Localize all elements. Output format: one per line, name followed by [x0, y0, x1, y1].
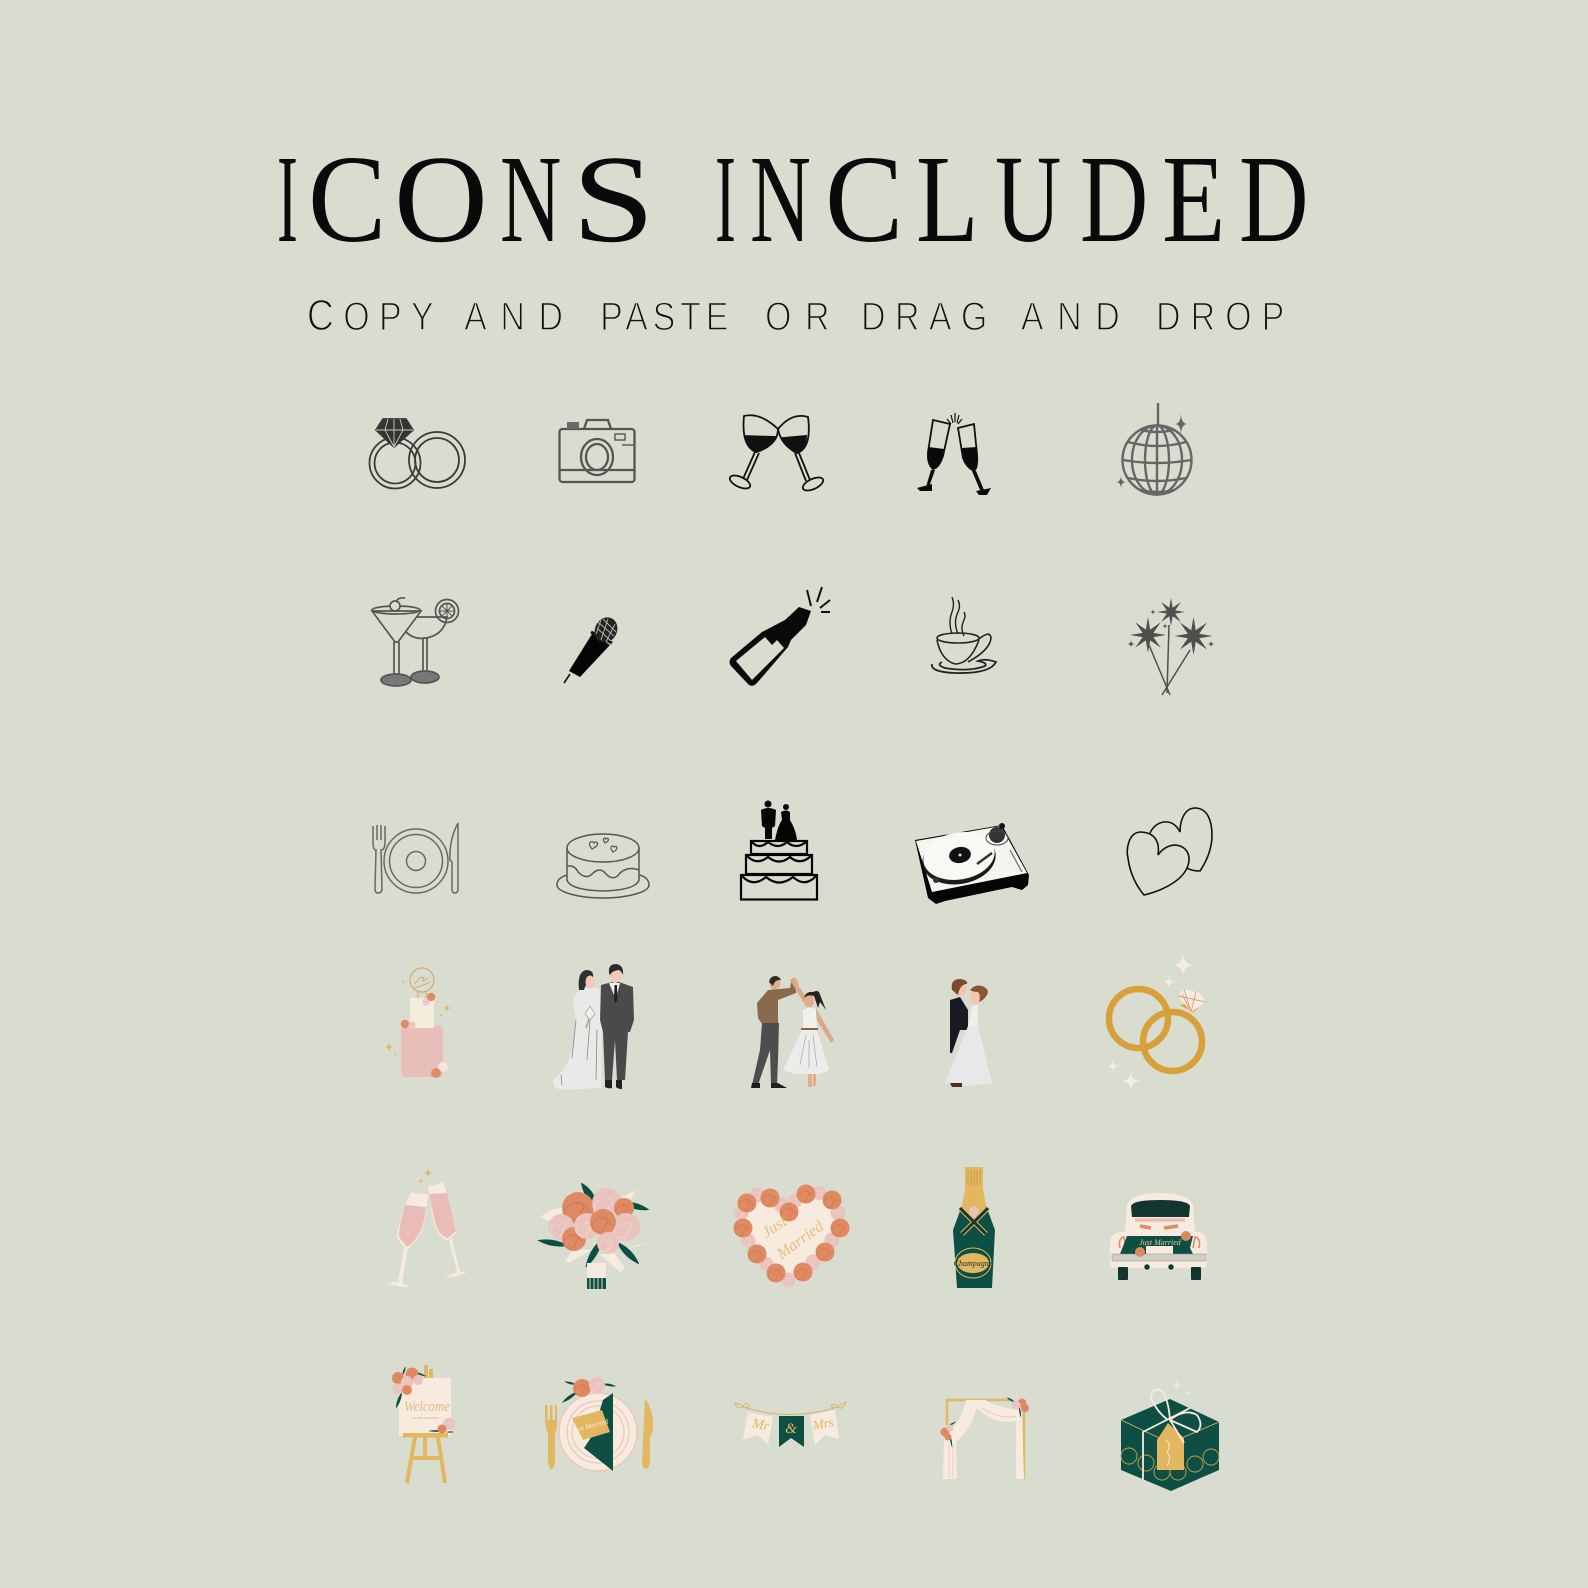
icon: pink champagne flutes	[387, 1168, 467, 1288]
title: E	[1162, 131, 1225, 269]
icon: bride and groom standing	[553, 964, 634, 1090]
icon: champagne bottle: Champagne	[954, 1259, 993, 1268]
icon: floral arch	[940, 1397, 1029, 1479]
icon: mr and mrs bunting	[735, 1402, 846, 1447]
icon: cocktails	[372, 598, 458, 686]
icon: welcome sign easel: Welcome	[404, 1399, 450, 1415]
icon: just married car	[1110, 1193, 1207, 1280]
icon: mr and mrs bunting: &	[785, 1421, 797, 1437]
icon: welcome sign easel	[392, 1365, 455, 1483]
title: D	[1080, 131, 1148, 269]
title: U	[995, 131, 1062, 269]
icon: couple dancing	[751, 976, 834, 1088]
icon: microphone	[564, 614, 621, 683]
icon: pink wedding cake	[384, 968, 452, 1078]
icon: green gift box	[1121, 1379, 1219, 1491]
icon: just married car: Just Married	[1139, 1238, 1182, 1247]
title: I	[715, 131, 736, 269]
icon: place setting outline	[373, 823, 458, 893]
icon: colour place setting: Just Married	[572, 1417, 610, 1435]
icon: sparklers	[1127, 598, 1214, 695]
icon: rose bouquet	[537, 1180, 650, 1289]
subtitle: C	[307, 290, 343, 340]
icon: just married rose heart	[734, 1184, 850, 1288]
icon: disco ball	[1116, 403, 1192, 494]
icon: champagne bottle	[953, 1167, 995, 1288]
icon: coffee cup	[932, 597, 996, 673]
icon: mr and mrs bunting: Mr	[750, 1417, 771, 1435]
subtitle: AND	[464, 293, 577, 339]
icon: couple embracing	[945, 979, 992, 1087]
icon: welcome sign easel: TO OUR WEDDING	[412, 1416, 439, 1420]
icon: just married rose heart: Married	[773, 1217, 828, 1263]
title: I	[277, 131, 298, 269]
subtitle: DROP	[1156, 293, 1294, 339]
icon: tiered cake with couple topper	[741, 800, 817, 900]
icon: mr and mrs bunting: Mrs	[811, 1414, 835, 1433]
subtitle: PASTE	[600, 293, 733, 339]
title: L	[916, 131, 978, 269]
title: O	[394, 131, 487, 269]
icon: diamond ring and band	[370, 419, 465, 488]
icon: turntable	[915, 823, 1029, 904]
icon: colour place setting	[545, 1377, 653, 1471]
subtitle: DRAG	[861, 293, 997, 339]
title	[277, 131, 1309, 269]
title: C	[825, 131, 903, 269]
icon: champagne bottle popping	[730, 587, 830, 686]
title: N	[500, 131, 561, 269]
icon: two hearts outline	[1127, 808, 1212, 895]
subtitle: OR	[765, 293, 843, 339]
icon: clinking champagne flutes	[917, 413, 991, 495]
title: C	[308, 131, 386, 269]
icon: gold rings with diamond	[1106, 953, 1206, 1092]
title: S	[572, 131, 654, 269]
subtitle: AND	[1021, 293, 1133, 339]
icon: clinking wine glasses	[728, 415, 825, 493]
subtitle: OPY	[343, 293, 443, 339]
icon: camera	[560, 420, 635, 482]
title: N	[750, 131, 811, 269]
icon: round cake outline	[557, 834, 649, 898]
title: D	[1239, 131, 1309, 269]
icon: just married rose heart: Just	[759, 1213, 790, 1241]
